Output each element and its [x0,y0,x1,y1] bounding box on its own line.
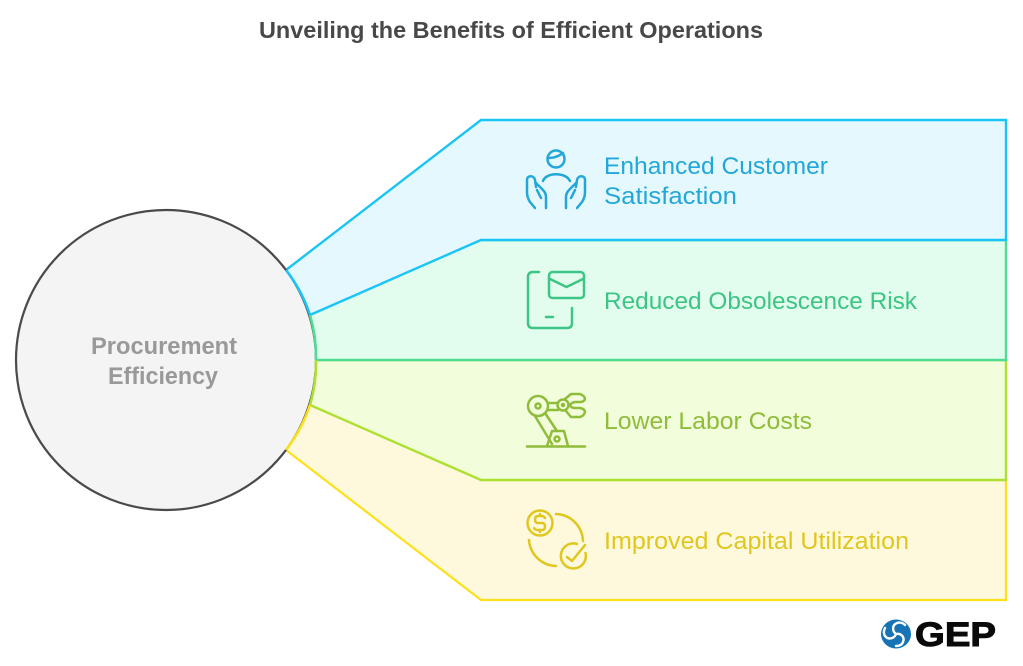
icon: dollar and check cycle [528,510,586,568]
logo swirl icon [881,620,911,648]
label: lower labor costs: Lower Labor Costs [604,408,812,435]
icon: robot arm [527,394,585,446]
label: reduced obsolescence risk: Reduced Obsolescence Risk [604,288,918,315]
panel: lower labor costs [310,360,1006,480]
label: procurement efficiency: Efficiency [108,363,219,390]
logo wordmark: GEP [915,616,996,654]
panel: enhanced customer satisfaction [286,120,1006,315]
label: improved capital utilization: Improved Capital Utilization [604,528,909,555]
logo: GEP [881,616,996,654]
label: enhanced customer satisfaction [604,153,828,210]
panel: reduced obsolescence risk [310,240,1006,360]
icon: person held by hands [527,150,585,208]
circle: procurement efficiency [16,210,316,510]
panel: improved capital utilization [286,405,1006,600]
icon: tablet with envelope [528,272,584,328]
label: enhanced customer satisfaction: Satisfaction [604,183,737,210]
title: Unveiling the Benefits of Efficient Operations [259,17,763,43]
label: procurement efficiency: Procurement [91,333,237,360]
label: enhanced customer satisfaction: Enhanced Customer [604,153,828,180]
label: procurement efficiency [91,333,237,390]
